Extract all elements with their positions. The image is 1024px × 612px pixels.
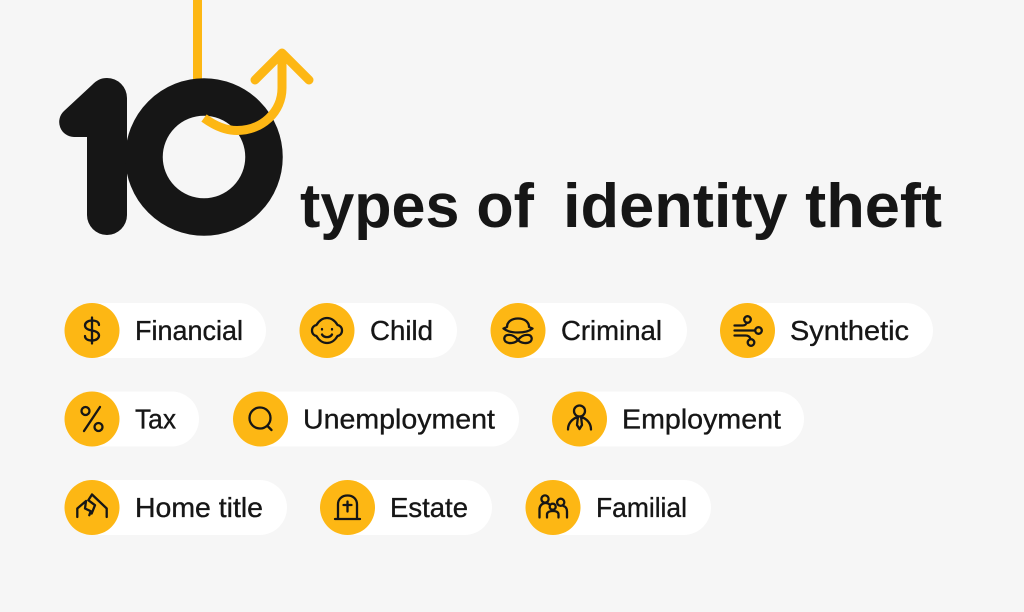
pill: Synthetic: Synthetic	[790, 315, 909, 346]
pill: Familial: Familial	[596, 492, 687, 523]
pill: Synthetic	[720, 303, 933, 358]
icon: family	[540, 495, 567, 518]
numeral 0	[144, 97, 264, 217]
icon: child face	[312, 318, 342, 343]
pill: Employment	[552, 392, 804, 446]
icon: percent	[82, 407, 102, 431]
arrow	[204, 53, 309, 130]
hero number 10 with hook arrow	[59, 0, 309, 235]
pill: Financial	[64, 303, 266, 358]
pill: Financial: Financial	[135, 315, 243, 346]
pill: Tax: Tax	[135, 404, 176, 434]
pill: Familial	[526, 480, 711, 535]
title: identity theft	[563, 172, 942, 241]
pill: Unemployment: Unemployment	[303, 404, 495, 434]
icon: employee with tie	[568, 406, 591, 430]
pill: Criminal	[490, 303, 687, 358]
pill: Estate	[320, 480, 492, 535]
icon: tombstone	[335, 496, 360, 519]
pill: Child	[300, 303, 457, 358]
pill: Employment: Employment	[622, 404, 781, 434]
pill: Unemployment	[233, 392, 519, 446]
icon: synthetic network lines	[734, 316, 762, 346]
icon: magnifier	[250, 408, 272, 430]
hook line	[193, 0, 202, 90]
pill: Tax	[64, 392, 199, 446]
pill: Home title	[64, 480, 287, 535]
pill: Estate: Estate	[390, 492, 468, 523]
pill: Criminal: Criminal	[561, 315, 662, 346]
numeral 1	[59, 78, 127, 235]
icon: broken house	[77, 494, 107, 517]
icon: masked criminal	[504, 318, 532, 343]
pill: Child: Child	[370, 315, 433, 346]
icon: dollar	[85, 318, 99, 344]
pill: Home title: Home title	[135, 492, 263, 523]
title: types of	[300, 172, 534, 241]
